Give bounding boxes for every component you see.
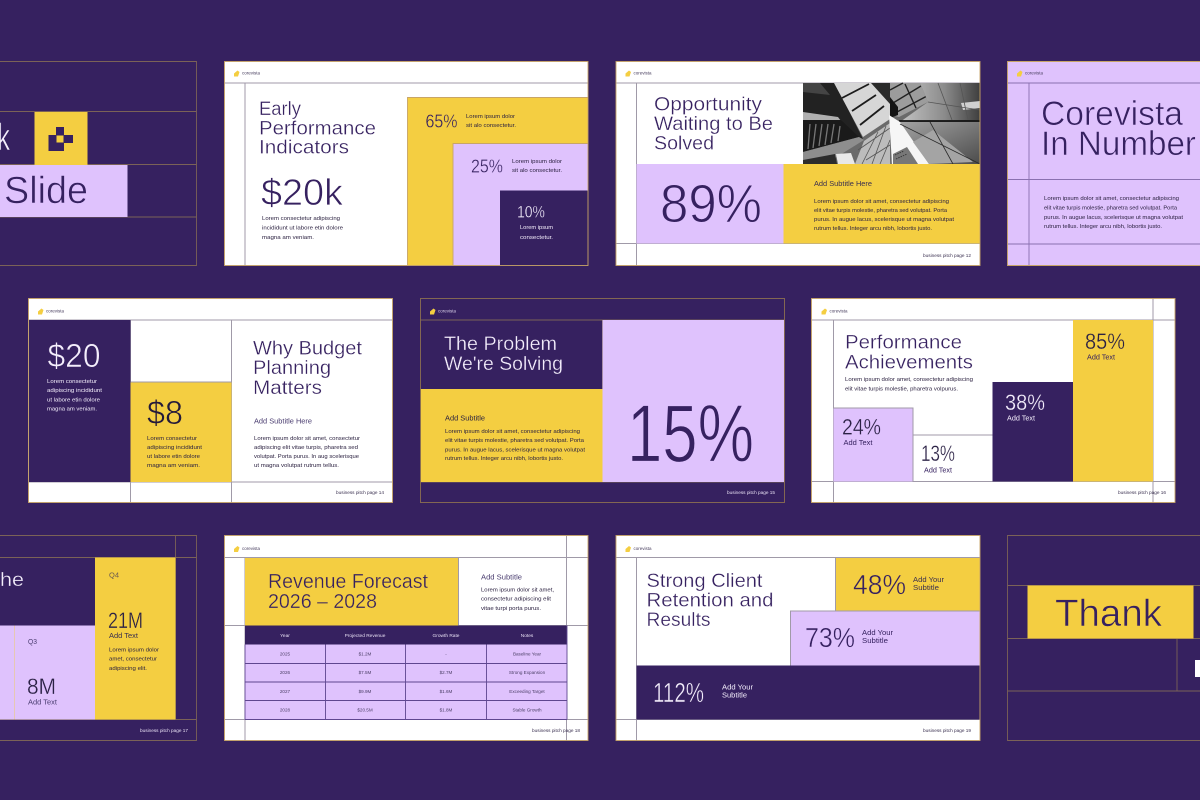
panel: purple 112%: 112% [653,677,704,708]
table rows: 2028 [280,708,291,712]
title panel: yellow: Revenue Forecast [268,571,428,593]
bar: purple 38%: 38% [1005,390,1045,415]
title: Achievements [845,352,973,374]
panel: lilac 15% [602,320,784,482]
subtitle text block: consectetur adipiscing elit [481,596,551,602]
title: Solved [654,132,714,154]
title [845,332,973,374]
title: Opportunity [654,94,762,116]
panel: yellow text block [420,389,602,482]
panel: yellow Q4 [95,558,176,720]
panel: yellow $8: Lorem consectetur [147,436,197,442]
logo [234,546,260,552]
title: Indicators [259,136,349,158]
description: Lorem ipsum dolor amet, consectetur adipiscing [845,377,973,383]
logo: corevista [242,70,260,76]
nested panel: yellow 65%: sit alo consectetur. [466,123,516,129]
panel: yellow Q4: amet, consectetur [109,656,157,662]
slide: Revenue Forecast 2026-2028 [224,536,588,740]
panel: yellow 48%: 48% [853,569,906,600]
nested panel: yellow 65% [408,98,588,266]
panel: yellow Q4: adipiscing elit. [109,666,147,672]
panel: yellow $8: ut labore etin dolore [147,454,200,460]
logo [430,308,456,314]
panel: lilac 73% [790,611,980,666]
revenue table [245,626,567,720]
nested panel: yellow 65%: 65% [426,110,458,131]
footer page label: business pitch page 15 [727,490,775,495]
title: Performance [845,332,962,354]
panel: yellow text block: purus. In augue lacus, scelerisque ut magna volutpat [814,217,954,223]
panel: yellow 48%: Subtitle [913,585,939,592]
title: Why Budget [253,338,363,360]
panel: lilac 73%: Add Your [862,630,894,637]
panel: yellow Q4: Q4 [109,572,119,580]
slide: Opportunity Waiting to Be Solved [616,62,980,266]
description [845,377,973,392]
description: volutpat. Porta purus. In aug scelerisque [254,454,359,460]
description: ut magna volutpat rutrum tellus. [254,463,339,469]
table rows: $1.6M [440,689,453,694]
title [646,570,774,631]
bar: white 13% [913,435,992,474]
panel: yellow text block: rutrum tellus. Integer arcu nibh, lobortis justo. [445,456,563,462]
panel: yellow 48% [836,558,980,611]
logo [626,70,652,76]
title [1041,95,1196,163]
panel: purple $20 [29,320,130,482]
slide: The Problem We're Solving [420,298,784,502]
cropped heading: he [0,569,24,591]
title panel: yellow: 2026 – 2028 [268,591,377,613]
panel: purple $20: magna am veniam. [47,406,97,412]
nested panel: purple 10%: Lorem ipsum [520,225,553,231]
logo: corevista [46,308,64,314]
logo [38,308,64,314]
panel: yellow text block: Lorem ipsum dolor sit amet, consectetur adipiscing [814,199,949,205]
table header row: Growth Rate [433,633,460,639]
logo: corevista [1025,70,1043,76]
logo: corevista [634,546,652,551]
title: Retention and [646,590,774,612]
bar: lilac 24% [834,408,913,482]
logo [234,70,260,76]
slide: Performance Achievements [812,298,1175,502]
panel: yellow $8 [130,382,232,482]
subtitle text block: vitae turpi porta purus. [481,606,541,612]
cropped white block [1195,660,1200,677]
panel: purple 112%: Subtitle [722,692,747,700]
panel: lilac 89%: 89% [660,174,762,234]
footer page label: business pitch page 16 [1118,490,1166,495]
logo: corevista [634,70,652,76]
panel: lilac Q3: 8M [27,674,56,699]
panel: lilac 15%: 15% [627,388,754,480]
footer page label: business pitch page 18 [532,728,580,733]
logo: corevista [242,546,260,551]
title: The Problem [444,333,557,355]
panel: purple $20: Lorem consectetur [47,379,97,385]
panel: yellow $8: magna am veniam. [147,463,200,469]
bar: yellow 85%: 85% [1085,329,1125,354]
panel: yellow Q4: Lorem ipsum dolor [109,648,159,654]
panel: yellow text block: Add Subtitle [445,416,485,422]
table header row: Notes [521,633,534,639]
panel: purple $20: $20 [48,337,100,374]
panel: yellow 48%: Add Your [913,577,945,584]
description: incididunt ut labore etin dolore [262,226,343,232]
nested panel: lilac 25%: 25% [471,156,503,176]
title: Strong Client [646,570,763,592]
table rows [280,652,546,712]
title: Performance [259,118,376,140]
title: In Number [1041,125,1196,163]
subtitle text block: Add Subtitle [481,574,522,582]
nested panel: lilac 25% [453,144,588,266]
bar: white 13%: Add Text [924,468,952,474]
table rows: Stable Growth [512,708,542,712]
footer page label: business pitch page 12 [923,253,971,258]
table rows: $20.5M [357,708,373,712]
logo [1017,70,1043,76]
panel: lilac 73%: Subtitle [862,638,888,645]
panel: purple 112% [636,666,980,720]
title: Results [646,609,711,631]
slide: quarterly results (cropped left) [0,536,196,740]
bar: yellow 85%: Add Text [1087,354,1115,362]
logo: corevista [830,308,848,314]
bar: lilac 24%: 24% [842,414,881,440]
panel: lilac Q3: Q3 [28,639,37,646]
table rows: Strong Expansion [509,670,546,675]
slide: title slide (cropped left) [0,62,196,266]
title: Waiting to Be [654,113,773,135]
description: rutrum tellus. Integer arcu nibh, lobortis justo. [1044,224,1162,230]
description [262,216,343,241]
panel: lilac Q3: Add Text [28,700,57,706]
nested panel: yellow 65%: Lorem ipsum dolor [466,114,515,120]
footer page label: business pitch page 17 [140,728,188,733]
panel: lilac Q3 [0,626,95,720]
panel: yellow text block: elit vitae turpis molestie, pharetra sed volutpat. Porta [814,208,948,214]
panel: yellow text block: Add Subtitle Here [814,181,872,188]
nested panel: lilac 25%: sit alo consectetur. [512,168,562,174]
panel: yellow Q4: Add Text [109,633,138,640]
nested panel: purple 10% [500,190,588,266]
slide: Thank You (cropped right) [1008,536,1200,740]
title [259,98,376,158]
description: purus. In augue lacus, scelerisque ut magna volutpat [1044,215,1183,221]
slide: Corevista In Number (cropped right) [1008,62,1200,266]
title: Matters [253,377,322,399]
panel: yellow text block [784,164,980,244]
bar: purple 38%: Add Text [1007,416,1035,422]
table rows: - [445,652,447,656]
title [444,333,563,375]
footer page label: business pitch page 19 [923,728,971,733]
footer page label: business pitch page 14 [336,490,384,495]
description: elit vitae turpis molestie, pharetra volpurus. [845,386,958,392]
table rows: 2025 [280,652,291,656]
logo [626,546,652,552]
panel: yellow $8: adipiscing incididunt [147,445,202,451]
nested panel: purple 10%: consectetur. [520,235,553,241]
title panel: yellow [245,558,458,626]
bar: yellow 85% [1073,320,1153,482]
panel: purple $20: ut labore etin dolore [47,398,100,404]
bar: purple 38% [992,382,1073,482]
icon tile: yellow square with logo mark [34,112,88,165]
nested panel: purple 10%: 10% [517,202,545,222]
slide: Why Budget Planning Matters [28,298,392,502]
yellow heading block: Thank: Thank [1055,593,1163,635]
panel: yellow text block: rutrum tellus. Integer arcu nibh, lobortis justo. [814,226,932,232]
bar: white 13%: 13% [921,441,955,466]
description [1044,196,1183,230]
nested panel: lilac 25%: Lorem ipsum dolor [512,159,562,165]
subtitle text block: Lorem ipsum dolor sit amet, [481,588,554,594]
title: We're Solving [444,353,563,375]
description: adipiscing elit vitae turpis, pharetra sed [254,445,358,451]
table header row: Projected Revenue [345,633,386,639]
table rows: Baseline Year [513,652,542,656]
bar: lilac 24%: Add Text [844,440,873,447]
title: Corevista [1041,95,1183,133]
table header row [280,633,534,639]
description: Lorem ipsum dolor sit amet, consectetur adipiscing [1044,196,1179,202]
description: magna am veniam. [262,235,314,241]
panel: lilac 73%: 73% [805,622,855,653]
panel: yellow text block: purus. In augue lacus, scelerisque ut magna volutpat [445,448,585,454]
lilac heading block: Slide: Slide [4,170,88,212]
photo: black and white skyscraper looking up [803,83,980,165]
table rows: $1.2M [359,652,372,656]
subtitle text block [481,574,554,612]
table rows: $9.9M [359,689,372,694]
panel: yellow text block: elit vitae turpis molestie, pharetra sed volutpat. Porta [445,438,585,444]
title [253,338,363,399]
panel: yellow $8: $8 [147,394,183,431]
table rows: $7.5M [359,670,372,675]
panel: yellow text block: Lorem ipsum dolor sit amet, consectetur adipiscing [445,429,580,435]
slide: Early Performance Indicators [224,62,588,266]
table header row: Year [280,633,290,639]
title: Early [259,98,301,120]
logo: corevista [438,308,456,314]
table rows: $2.7M [440,670,453,675]
table rows: 2026 [280,670,291,675]
panel: purple 112%: Add Your [722,684,754,692]
title [654,94,773,154]
description: Lorem consectetur adipiscing [262,216,340,222]
logo [822,308,848,314]
description [254,436,360,469]
slide: Strong Client Retention and Results [616,536,980,740]
panel: yellow Q4: 21M [108,608,143,633]
table rows: 2027 [280,689,291,694]
panel: purple $20: adipiscing incididunt [47,388,102,394]
big stat $20k: $20k [261,172,344,213]
description: elit vitae turpis molestie, pharetra sed volutpat. Porta [1044,206,1178,212]
panel: lilac 89% [636,164,784,244]
subtitle: Add Subtitle Here [254,418,312,426]
description: Lorem ipsum dolor sit amet, consectetur [254,436,360,442]
table rows: Exceeding Target [509,689,545,694]
lilac heading block: Slide [0,165,128,217]
title: Planning [253,357,331,379]
yellow heading block: Thank [1028,586,1194,638]
table rows: $1.8M [440,708,453,712]
